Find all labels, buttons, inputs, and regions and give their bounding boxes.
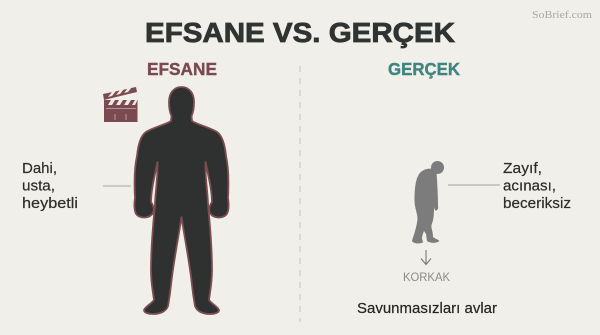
- icon: film clapperboard: [103, 87, 138, 122]
- reality label: beceriksiz: [503, 195, 571, 212]
- reality label: [503, 160, 571, 212]
- myth label: Dahi,: [22, 160, 57, 177]
- icon: hunched small figure: [412, 161, 444, 243]
- cowardly label: KORKAK: [403, 270, 450, 284]
- panel: reality: [357, 59, 571, 317]
- title: EFSANE VS. GERÇEK: [145, 17, 455, 48]
- prey caption: Savunmasızları avlar: [357, 300, 497, 317]
- panel: myth: [22, 59, 229, 314]
- myth label: [22, 160, 78, 212]
- reality connector: [448, 184, 500, 186]
- watermark: SoBrief.com: [532, 9, 592, 21]
- reality label: Zayıf,: [503, 160, 542, 177]
- icon: large heroic silhouette: [134, 87, 229, 314]
- myth label: usta,: [22, 178, 55, 194]
- myth label: heybetli: [22, 195, 78, 212]
- reality label: acınası,: [503, 178, 556, 194]
- arrow: down: [421, 250, 431, 264]
- reality heading: GERÇEK: [388, 59, 460, 79]
- myth connector: [103, 185, 131, 187]
- myth heading: EFSANE: [147, 59, 217, 79]
